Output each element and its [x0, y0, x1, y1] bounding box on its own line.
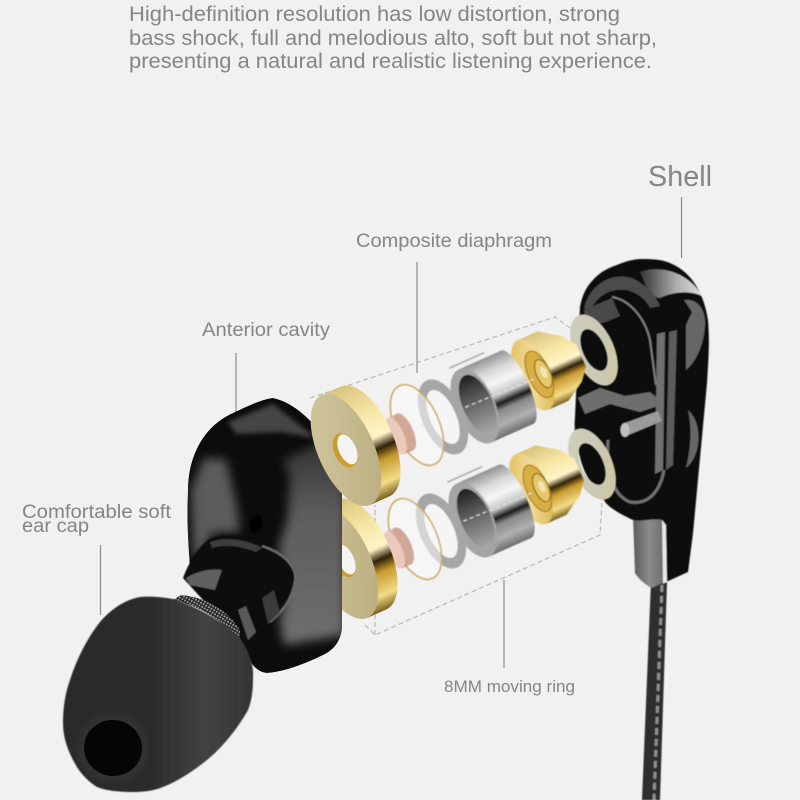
leader line: Anterior cavity — [235, 353, 237, 412]
leader line: Composite diaphragm — [416, 262, 418, 373]
lower gold disc — [342, 498, 398, 619]
lower component stack — [377, 421, 626, 587]
side port — [250, 515, 262, 533]
cap body — [63, 597, 253, 792]
label: 8MM moving ring: 8MM moving ring — [444, 678, 575, 696]
inner column — [655, 332, 665, 474]
label: Comfortable soft ear cap: ear cap — [22, 516, 89, 537]
right bulges — [684, 300, 705, 370]
ear cap — [63, 597, 253, 792]
upper component stack — [379, 307, 628, 473]
neck outer ring edge — [262, 546, 295, 622]
knurled mesh ring — [173, 595, 240, 642]
intro paragraph — [129, 3, 657, 73]
shell tail — [633, 515, 665, 588]
cavity body — [187, 398, 342, 673]
cross brace — [578, 388, 664, 414]
label: Comfortable soft ear cap — [22, 502, 172, 537]
left reflection — [191, 458, 240, 556]
label: Anterior cavity: Anterior cavity — [202, 320, 331, 341]
shell top highlight — [640, 269, 702, 298]
anterior cavity — [187, 398, 345, 673]
neck connector — [183, 535, 295, 646]
cable — [642, 582, 667, 800]
cap hole — [80, 715, 146, 781]
upper chamber rim highlight — [612, 297, 656, 385]
leader line: 8MM moving ring — [503, 580, 505, 668]
top band — [210, 539, 262, 552]
neck band — [186, 569, 222, 590]
shell body — [575, 259, 709, 582]
label: Comfortable soft ear cap: Comfortable soft — [22, 502, 172, 523]
right reflection — [278, 440, 345, 645]
top sheen — [228, 404, 316, 438]
label: Composite diaphragm: Composite diaphragm — [356, 230, 552, 252]
leader line: Shell — [680, 197, 682, 258]
lower strips — [238, 606, 256, 640]
upper rim gray — [584, 277, 660, 312]
debris behind ring — [584, 298, 620, 326]
cap rim shade — [71, 706, 155, 790]
neck base — [183, 535, 295, 646]
upper gold disc — [296, 375, 415, 516]
pin — [622, 411, 662, 436]
intro paragraph: High-definition resolution has low distortion, strong — [129, 3, 620, 26]
label: Shell: Shell — [648, 161, 712, 193]
rear shell — [575, 259, 709, 588]
intro paragraph: presenting a natural and realistic listening experience. — [129, 50, 652, 73]
lower frame rim — [608, 440, 664, 502]
exploded view dashed box — [310, 317, 602, 635]
intro paragraph: bass shock, full and melodious alto, soft but not sharp, — [129, 27, 657, 50]
leader line: ear cap — [100, 545, 102, 615]
tail highlight — [662, 520, 667, 584]
